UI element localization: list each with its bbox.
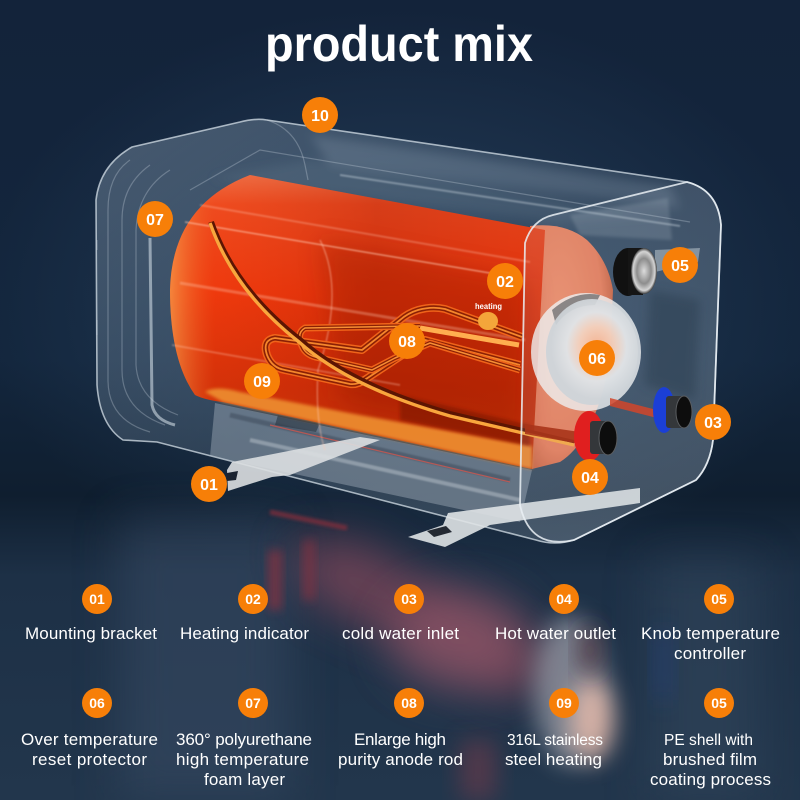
legend item 07: 360° polyurethane	[176, 730, 312, 749]
thin glass highlights	[220, 175, 680, 240]
legend item 06	[21, 688, 158, 769]
legend item 09	[505, 688, 603, 769]
anode rod	[210, 222, 574, 445]
legend item 08	[338, 688, 463, 769]
legend item 04	[495, 584, 616, 643]
diagram badge 10	[302, 97, 338, 133]
diagram badge 06: 06	[588, 351, 606, 368]
legend item 05	[641, 584, 780, 663]
legend item 08: purity anode rod	[338, 750, 463, 769]
mounting brackets	[227, 437, 640, 547]
legend item 02: Heating indicator	[180, 624, 309, 643]
diagram badge 09	[244, 363, 280, 399]
tank shading	[170, 175, 545, 469]
dark underside strip	[400, 395, 530, 446]
legend item 06: 06	[89, 695, 105, 711]
legend item 05: 05	[711, 591, 727, 607]
diagram badge 05: 05	[671, 258, 689, 275]
legend item 10 labelled 05: PE shell with	[664, 732, 753, 749]
legend item 10 labelled 05	[650, 688, 771, 789]
back panel contours	[97, 120, 690, 432]
diagram badge 02	[487, 263, 523, 299]
top glass streaks	[210, 135, 680, 222]
legend item 04: Hot water outlet	[495, 624, 616, 643]
background glow	[0, 10, 800, 590]
legend item 07: high temperature	[176, 750, 309, 769]
inner front panel	[570, 198, 672, 240]
transparent shell body	[96, 119, 721, 543]
diagram badge 03	[695, 404, 731, 440]
legend item 07: foam layer	[204, 770, 285, 789]
diagram badge 01	[191, 466, 227, 502]
legend item 09: 09	[556, 695, 572, 711]
title: product mix	[265, 16, 533, 72]
legend item 05: controller	[674, 644, 746, 663]
legend item 06: Over temperature	[21, 730, 158, 749]
diagram badge 08: 08	[398, 334, 416, 351]
over temperature protector flange	[531, 293, 641, 411]
legend item 09: steel heating	[505, 750, 602, 769]
diagram badge 06	[579, 340, 615, 376]
diagram badge 10: 10	[311, 108, 329, 125]
dark interior right	[645, 290, 700, 400]
hot water pipe	[525, 424, 580, 444]
hot water outlet fitting	[574, 411, 617, 461]
gold underside band	[205, 388, 532, 469]
diagram badge 04: 04	[581, 470, 599, 487]
legend item 04: 04	[556, 591, 572, 607]
cold water pipe	[610, 398, 657, 418]
orange inner tank	[170, 175, 545, 469]
knob temperature controller	[613, 248, 700, 296]
heating tube coil	[266, 308, 522, 384]
cold water inlet fitting	[653, 387, 692, 433]
shell reflection streaks	[172, 205, 530, 450]
diagram badge 01: 01	[200, 477, 218, 494]
water heater illustration	[96, 119, 721, 547]
diagram badge 07: 07	[146, 212, 164, 229]
tank dome end	[530, 225, 613, 469]
diagram badge 03: 03	[704, 415, 722, 432]
legend item 08: Enlarge high	[354, 730, 446, 749]
legend item 06: reset protector	[32, 750, 147, 769]
heating indicator light	[475, 301, 502, 330]
legend item 01: 01	[89, 591, 105, 607]
dark red band	[320, 240, 530, 440]
legend item 07	[176, 688, 312, 789]
diagram badge 02: 02	[496, 274, 514, 291]
diagram badge 08	[389, 323, 425, 359]
legend item 03: cold water inlet	[342, 624, 459, 643]
legend item 10 labelled 05: brushed film	[663, 750, 757, 769]
legend item 10 labelled 05: coating process	[650, 770, 771, 789]
legend item 02: 02	[245, 591, 261, 607]
glass under tank	[210, 403, 532, 522]
legend item 02	[180, 584, 309, 643]
legend item 10 labelled 05: 05	[711, 695, 727, 711]
legend item 03: 03	[401, 591, 417, 607]
diagram badge 09: 09	[253, 374, 271, 391]
legend item 03	[342, 584, 459, 643]
legend item 07: 07	[245, 695, 261, 711]
floor reflection	[120, 512, 760, 800]
heating indicator light: heating	[475, 301, 502, 311]
front shell face	[520, 182, 721, 542]
legend item 05: Knob temperature	[641, 624, 780, 643]
legend item 09: 316L stainless	[507, 732, 603, 749]
legend item 01: Mounting bracket	[25, 624, 157, 643]
diagram badge 04	[572, 459, 608, 495]
legend item 08: 08	[401, 695, 417, 711]
diagram badge 05	[662, 247, 698, 283]
legend item 01	[25, 584, 157, 643]
diagram badge 07	[137, 201, 173, 237]
